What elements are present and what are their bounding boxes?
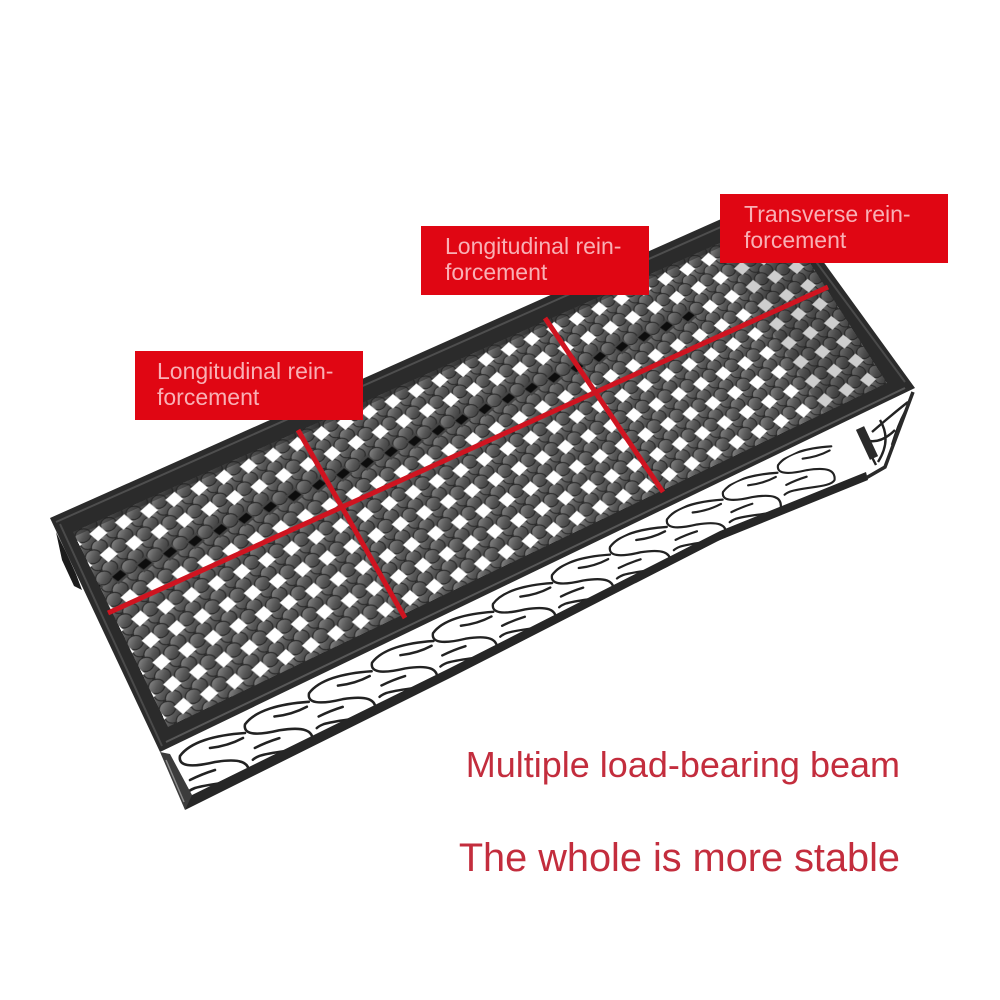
label: longitudinal middle: Longitudinal rein-: [445, 233, 621, 259]
transverse line left: [298, 430, 405, 618]
label: transverse: forcement: [744, 227, 846, 253]
end panel: curls: [853, 392, 913, 478]
side panel: scroll pattern: [160, 445, 868, 810]
label: longitudinal left: [135, 351, 363, 420]
rack frame and side panels: [50, 220, 915, 810]
label: transverse: [720, 194, 948, 263]
left outer edge: [56, 532, 82, 590]
transverse line right: [545, 318, 663, 492]
caption 1: Multiple load-bearing beam: [466, 744, 900, 785]
top frame: [50, 195, 915, 752]
label: longitudinal left: Longitudinal rein-: [157, 358, 333, 384]
label: longitudinal middle: forcement: [445, 259, 547, 285]
steel mesh top: [73, 243, 887, 727]
longitudinal line: [108, 287, 828, 613]
label: transverse: Transverse rein-: [744, 201, 911, 227]
label: longitudinal left: forcement: [157, 384, 259, 410]
label: longitudinal middle: [421, 226, 649, 295]
caption 2: The whole is more stable: [459, 836, 900, 880]
